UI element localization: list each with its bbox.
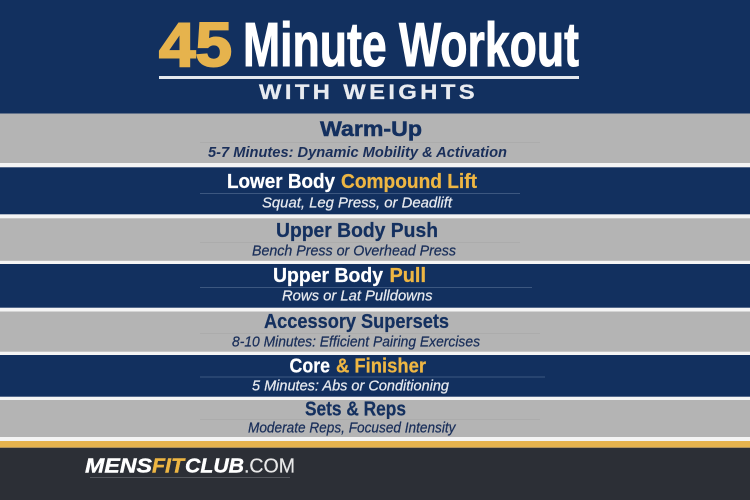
heading: core and finisher: Core — [290, 355, 330, 377]
logo: mensfitclub.com — [85, 456, 295, 478]
panel: upper body pull — [0, 264, 750, 308]
text: upper body pull detail: Rows or Lat Pulldowns — [282, 288, 433, 304]
logo: mensfitclub.com: MENS — [85, 456, 153, 478]
text: warm-up detail: 5-7 Minutes: Dynamic Mobility & Activation — [208, 144, 507, 161]
logo: mensfitclub.com: CLUB — [185, 456, 244, 478]
panel: accessory supersets — [0, 311, 750, 352]
text: lower body detail: Squat, Leg Press, or Deadlift — [262, 194, 453, 212]
header panel — [0, 0, 750, 114]
title: 45 Minute Workout: Minute Workout — [243, 11, 579, 80]
text: accessory detail: 8-10 Minutes: Efficient Pairing Exercises — [232, 334, 480, 350]
panel: warm-up — [0, 114, 750, 163]
title: 45 Minute Workout: 45 — [159, 11, 232, 80]
heading: upper body pull: Upper Body — [273, 265, 384, 287]
heading: accessory supersets: Accessory Supersets — [264, 311, 449, 333]
panel: lower body compound lift — [0, 167, 750, 214]
heading: sets and reps: Sets & Reps — [305, 399, 406, 421]
subtitle: with weights: WITH WEIGHTS — [259, 81, 478, 104]
logo: mensfitclub.com: .COM — [244, 456, 295, 478]
text: core detail: 5 Minutes: Abs or Conditioning — [252, 378, 450, 394]
heading: upper body pull: Pull — [390, 265, 426, 287]
panel: sets and reps — [0, 399, 750, 437]
panel: core and finisher — [0, 355, 750, 397]
heading: core and finisher — [290, 355, 426, 377]
footer panel — [0, 448, 750, 500]
heading: lower body compound lift: Lower Body — [227, 171, 336, 193]
text: upper body push detail: Bench Press or Overhead Press — [252, 242, 456, 260]
heading: warm-up: Warm-Up — [320, 118, 422, 141]
heading: lower body compound lift: Compound Lift — [341, 171, 477, 193]
text: sets and reps detail: Moderate Reps, Focused Intensity — [248, 420, 457, 436]
heading: upper body push: Upper Body Push — [276, 220, 438, 242]
panel: upper body push — [0, 218, 750, 261]
logo: mensfitclub.com: FIT — [152, 456, 186, 478]
title: 45 Minute Workout — [159, 11, 579, 80]
heading: core and finisher: & Finisher — [336, 355, 426, 377]
heading: lower body compound lift — [227, 171, 477, 193]
